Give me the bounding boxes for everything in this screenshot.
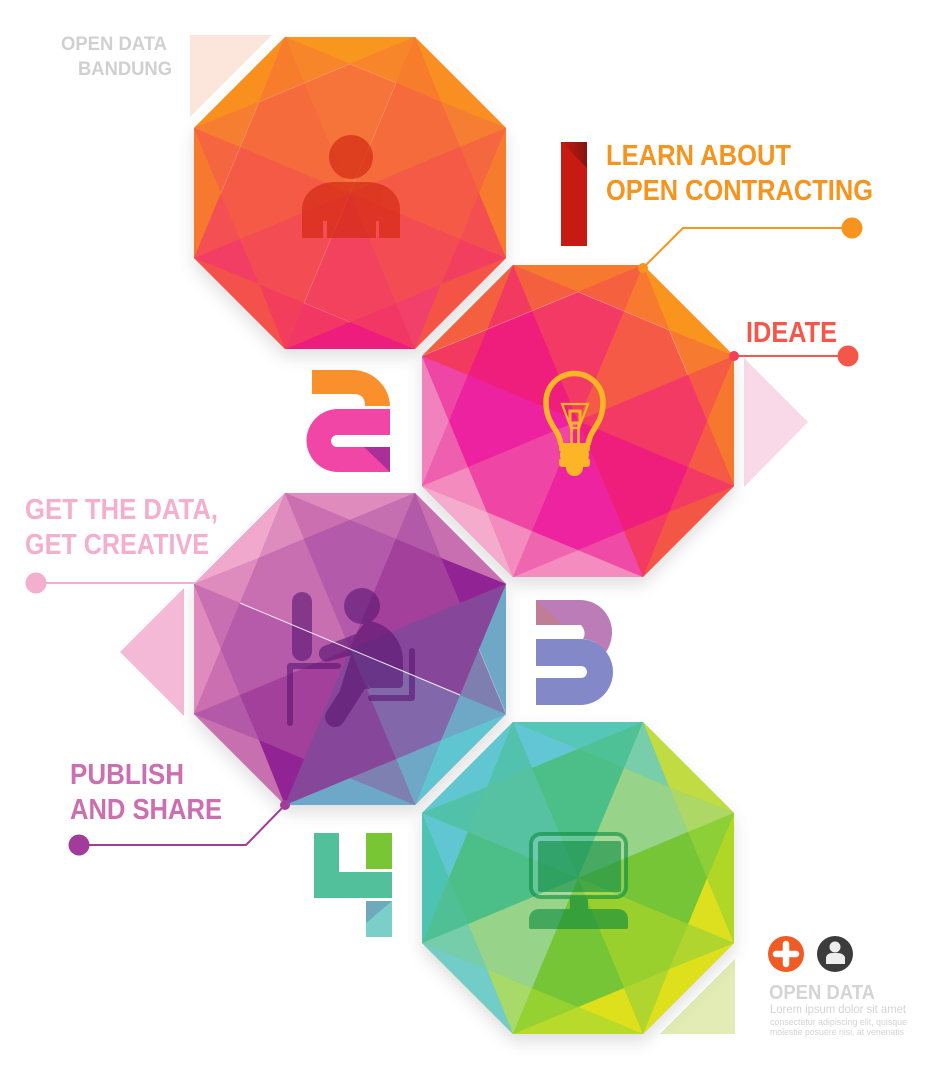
- numeral 4: [314, 833, 392, 937]
- icon: light bulb: [546, 374, 603, 476]
- footer text block: OPEN DATA: [769, 982, 875, 1004]
- heading: open data bandung: OPEN DATA: [61, 34, 167, 55]
- panel: octagon 4 green: [422, 722, 734, 1042]
- heading: learn about open contracting: LEARN ABOUT: [606, 140, 791, 172]
- leader line: ideate: [729, 346, 858, 366]
- heading: ideate: IDEATE: [746, 317, 837, 349]
- heading: learn about open contracting: [606, 140, 873, 207]
- heading: open data bandung: [61, 34, 172, 80]
- footer text block: molestie posuere nisi, at venenatis: [770, 1027, 904, 1038]
- heading: publish and share: [70, 759, 222, 826]
- leader line: publish: [68, 800, 290, 856]
- decorative triangle: top left: [190, 35, 272, 117]
- heading: publish and share: PUBLISH: [70, 759, 184, 791]
- decorative triangle: right: [744, 358, 808, 487]
- highlight line across purple octagon: [240, 603, 460, 695]
- heading: get the data get creative: GET THE DATA,: [25, 494, 218, 526]
- leader line: get the data: [26, 572, 195, 594]
- footer text block: consectetur adipiscing elit, quisque: [770, 1017, 907, 1028]
- heading: publish and share: AND SHARE: [70, 794, 222, 826]
- footer text block: [769, 982, 907, 1038]
- heading: get the data get creative: [25, 494, 218, 561]
- panel: octagon 2 pink: [422, 265, 734, 585]
- heading: get the data get creative: GET CREATIVE: [25, 529, 209, 561]
- leader line: learn: [638, 218, 862, 273]
- heading: learn about open contracting: OPEN CONTRACTING: [606, 175, 873, 207]
- footer text block: Lorem ipsum dolor sit amet: [770, 1002, 907, 1016]
- decorative triangle: left: [120, 588, 184, 716]
- heading: open data bandung: BANDUNG: [78, 59, 172, 80]
- numeral 2: [307, 370, 390, 472]
- icon: plus button: [768, 936, 804, 972]
- numeral 1: [561, 142, 587, 246]
- icon: user button: [817, 936, 853, 972]
- decorative triangle: bottom right: [660, 959, 735, 1034]
- panel: octagon 1 orange: [194, 37, 506, 357]
- icon: person seated at desk: [287, 588, 415, 726]
- icon: person: [302, 135, 400, 238]
- numeral 3: [536, 600, 613, 705]
- icon: desktop monitor: [529, 832, 628, 929]
- panel: octagon 3 purple: [194, 493, 506, 813]
